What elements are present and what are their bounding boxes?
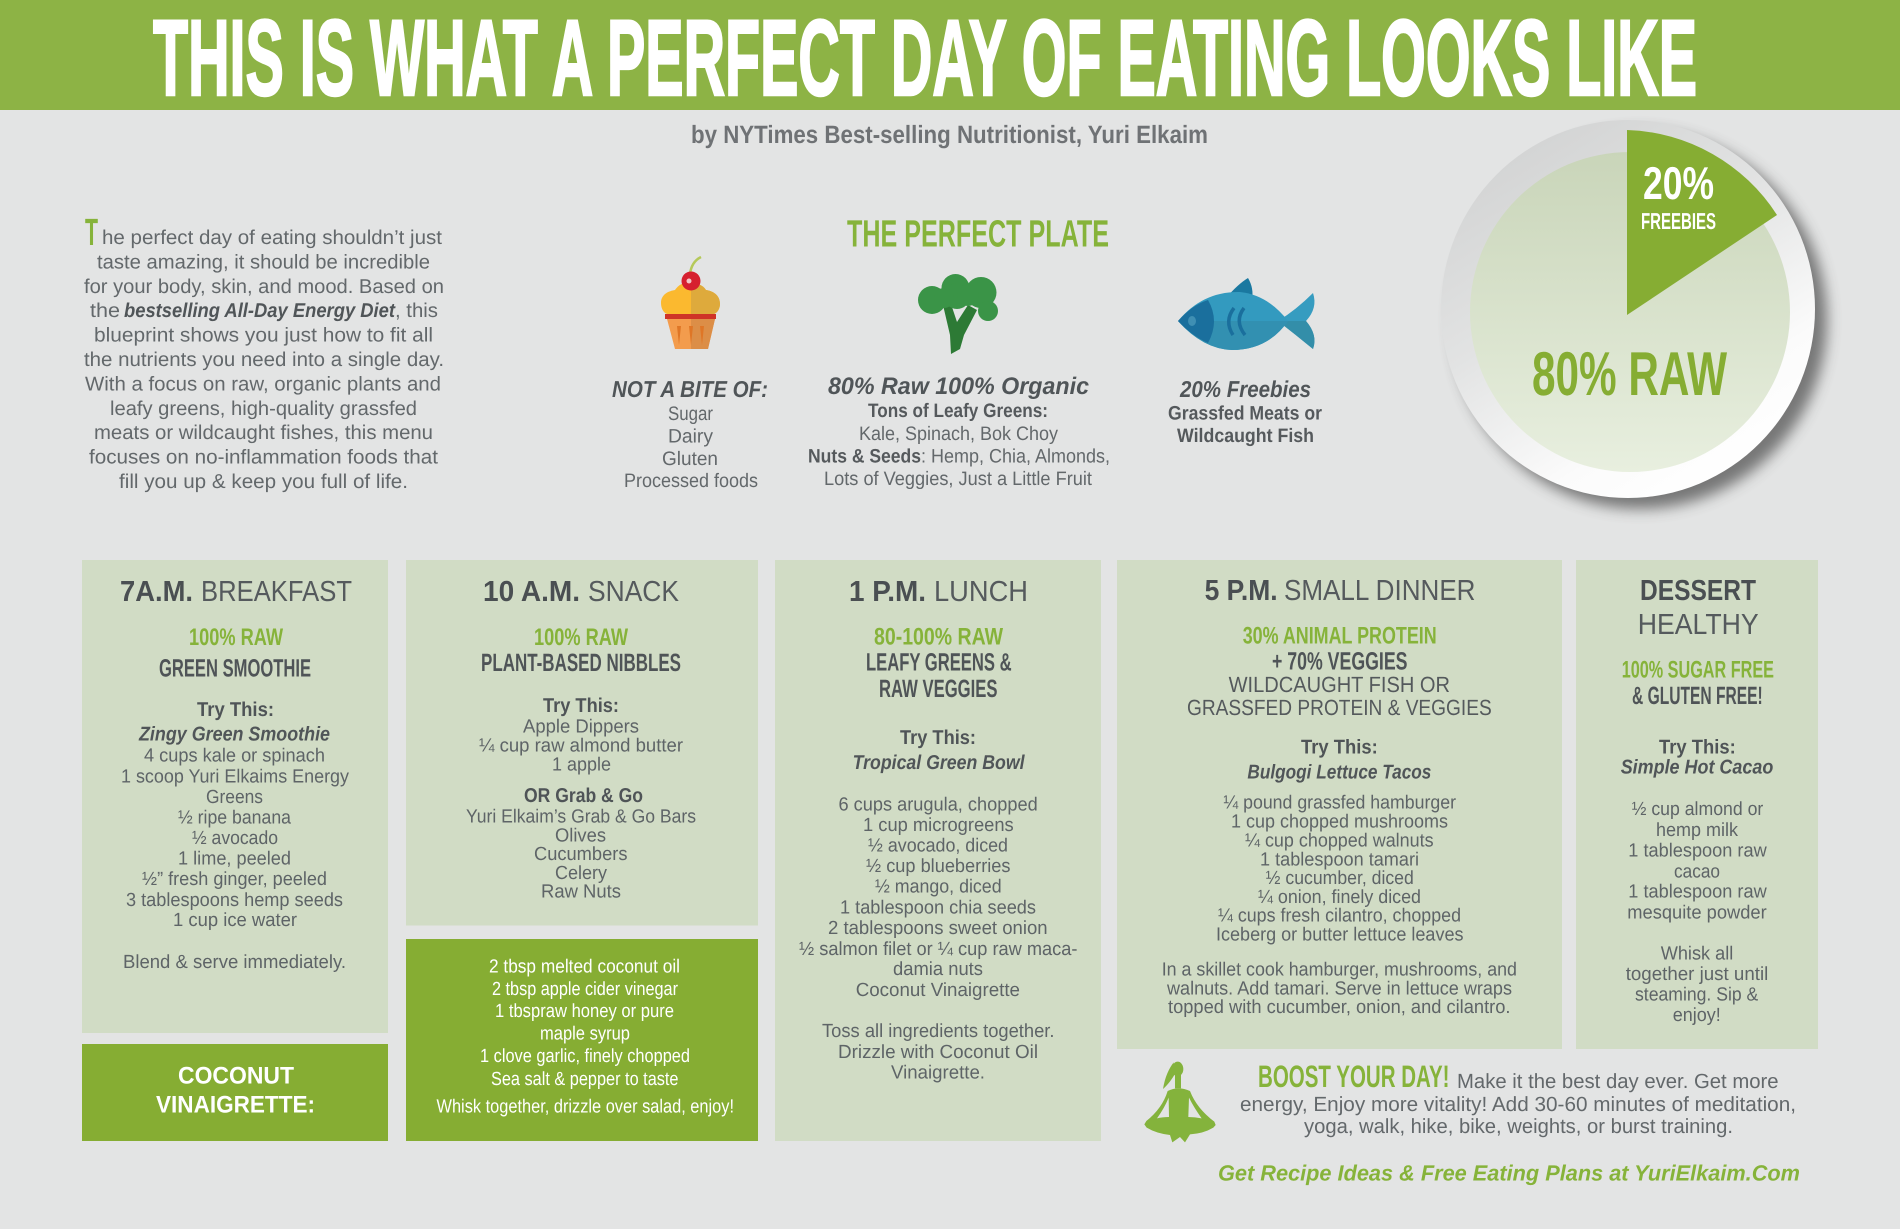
freebies column [1168, 376, 1322, 447]
not a bite of column: NOT A BITE OF: [612, 376, 768, 402]
intro paragraph: the [90, 300, 120, 322]
dinner subheading: + 70% VEGGIES [1272, 647, 1408, 675]
dessert recipe: 1 tablespoon raw [1628, 841, 1767, 862]
intro paragraph: meats or wildcaught fishes, this menu [94, 422, 433, 444]
raw organic column: 80% Raw 100% Organic [828, 373, 1089, 400]
dessert subheading [1622, 656, 1774, 710]
dinner heading: SMALL DINNER [1284, 575, 1476, 607]
snack recipe: Raw Nuts [541, 882, 621, 902]
intro paragraph: for your body, skin, and mood. Based on [84, 276, 444, 298]
boost your day callout [1240, 1059, 1796, 1138]
raw organic column: Nuts & Seeds [808, 446, 921, 468]
icon: cupcake [661, 257, 720, 349]
not a bite of column: Gluten [662, 448, 718, 470]
lunch heading: LUNCH [934, 576, 1028, 608]
wedge label: FREEBIES [1641, 208, 1716, 234]
panel: vinaigrette recipe [406, 939, 758, 1141]
intro paragraph: the nutrients you need into a single day. [84, 349, 444, 371]
snack recipe [466, 695, 696, 902]
dessert heading: DESSERT [1640, 575, 1756, 607]
breakfast recipe: ½” fresh ginger, peeled [142, 869, 327, 890]
dinner recipe: Iceberg or butter lettuce leaves [1216, 924, 1464, 946]
snack heading: 10 A.M. [483, 576, 580, 608]
dinner subheading: GRASSFED PROTEIN & VEGGIES [1187, 695, 1492, 720]
lunch recipe [799, 727, 1078, 1084]
icon: broccoli [918, 274, 998, 354]
panel: dessert [1576, 560, 1818, 1049]
panel: breakfast [82, 560, 388, 1033]
intro paragraph: , this [395, 300, 438, 322]
snack recipe: Cucumbers [534, 844, 628, 865]
dessert recipe: Simple Hot Cacao [1621, 756, 1773, 778]
byline: by NYTimes Best-selling Nutritionist, Yuri Elkaim [691, 121, 1208, 149]
snack recipe: Yuri Elkaim’s Grab & Go Bars [466, 806, 696, 828]
raw organic column: Kale, Spinach, Bok Choy [859, 423, 1058, 445]
lunch recipe: Toss all ingredients together. [822, 1021, 1054, 1042]
snack subheading: PLANT-BASED NIBBLES [481, 649, 681, 677]
dessert recipe: steaming. Sip & [1635, 985, 1759, 1006]
dinner recipe [1162, 736, 1517, 1018]
lunch subheading [866, 623, 1012, 703]
intro paragraph: blueprint shows you just how to fit all [94, 325, 433, 347]
dessert recipe: ½ cup almond or [1632, 799, 1764, 820]
lunch recipe: Try This: [900, 727, 976, 749]
not a bite of column: Dairy [668, 426, 713, 448]
not a bite of column [612, 376, 768, 492]
breakfast subheading [159, 624, 311, 682]
dessert recipe: mesquite powder [1627, 902, 1767, 923]
breakfast recipe: 3 tablespoons hemp seeds [126, 890, 343, 911]
lunch recipe: damia nuts [893, 959, 983, 980]
breakfast recipe: ½ avocado [192, 828, 278, 849]
panel: vinaigrette recipe: maple syrup [540, 1024, 630, 1044]
boost your day callout: yoga, walk, hike, bike, weights, or burst training. [1304, 1115, 1733, 1138]
not a bite of column: Sugar [668, 403, 713, 425]
dinner recipe: ¼ onion, finely diced [1258, 887, 1421, 908]
icon: fish [1178, 278, 1314, 350]
dinner recipe: ¼ cup chopped walnuts [1245, 830, 1434, 852]
freebies wedge [1627, 130, 1777, 315]
snack recipe: 1 apple [552, 754, 611, 776]
breakfast subheading: GREEN SMOOTHIE [159, 654, 311, 682]
dinner subheading [1187, 623, 1492, 720]
heading: the perfect plate: THE PERFECT PLATE [847, 214, 1109, 256]
intro paragraph: With a focus on raw, organic plants and [85, 373, 441, 395]
breakfast heading: 7A.M. [120, 576, 193, 608]
breakfast recipe: Blend & serve immediately. [123, 952, 346, 973]
raw label: 80% RAW [1532, 340, 1727, 409]
breakfast recipe: 1 cup ice water [173, 910, 298, 931]
raw organic column: Tons of Leafy Greens: [868, 400, 1048, 422]
dessert recipe: Whisk all [1661, 943, 1733, 964]
snack recipe: Celery [555, 863, 607, 884]
lunch subheading: 80-100% RAW [874, 623, 1003, 650]
dinner heading [1205, 575, 1476, 607]
dessert recipe: together just until [1626, 964, 1768, 985]
intro paragraph: taste amazing, it should be incredible [97, 251, 430, 273]
lunch recipe: Vinaigrette. [891, 1062, 985, 1084]
dinner subheading: 30% ANIMAL PROTEIN [1243, 623, 1437, 650]
boost your day callout: energy, Enjoy more vitality! Add 30-60 minutes of meditation, [1240, 1093, 1796, 1116]
snack subheading [481, 624, 681, 677]
panel: vinaigrette recipe: 2 tbsp apple cider vinegar [492, 979, 679, 1000]
lunch heading: 1 P.M. [849, 576, 926, 608]
panel: coconut vinaigrette label: COCONUT [178, 1063, 294, 1090]
dinner recipe: 1 tablespoon tamari [1260, 850, 1419, 870]
lunch recipe: 6 cups arugula, chopped [838, 794, 1038, 816]
lunch subheading: RAW VEGGIES [879, 675, 998, 703]
lunch recipe: ½ avocado, diced [868, 836, 1008, 857]
boost your day callout: Make it the best day ever. Get more [1457, 1070, 1779, 1093]
panel: coconut vinaigrette label [82, 1044, 388, 1141]
plate chart: 80% raw 20% freebies [1441, 120, 1827, 509]
panel: vinaigrette recipe: 1 tbspraw honey or pure [495, 1001, 674, 1022]
raw organic column: : Hemp, Chia, Almonds, [921, 446, 1110, 468]
dinner subheading: WILDCAUGHT FISH OR [1229, 672, 1450, 697]
lunch recipe: 2 tablespoons sweet onion [828, 918, 1048, 939]
breakfast recipe: Greens [206, 787, 263, 808]
dessert recipe [1621, 736, 1773, 1026]
icon: meditating figure [1144, 1062, 1216, 1142]
drop cap: T [85, 212, 98, 254]
not a bite of column: Processed foods [624, 470, 758, 492]
dinner recipe: In a skillet cook hamburger, mushrooms, and [1162, 960, 1517, 981]
lunch recipe: 1 cup microgreens [863, 815, 1014, 836]
dinner recipe: ¼ cups fresh cilantro, chopped [1218, 906, 1461, 926]
dinner recipe: Bulgogi Lettuce Tacos [1247, 762, 1431, 784]
raw organic column: Lots of Veggies, Just a Little Fruit [824, 468, 1093, 490]
snack heading [483, 576, 680, 608]
breakfast recipe: 1 lime, peeled [178, 849, 291, 870]
snack heading: SNACK [588, 576, 680, 608]
dessert subheading: 100% SUGAR FREE [1622, 656, 1774, 683]
freebies column: 20% Freebies [1179, 376, 1311, 402]
dessert recipe: 1 tablespoon raw [1628, 882, 1767, 903]
breakfast recipe: Zingy Green Smoothie [138, 724, 330, 746]
lunch recipe: Coconut Vinaigrette [856, 980, 1020, 1001]
panel: small dinner [1117, 560, 1562, 1049]
lunch heading [849, 576, 1028, 608]
dinner recipe: ½ cucumber, diced [1266, 868, 1414, 889]
lunch recipe: ½ salmon filet or ¼ cup raw maca- [799, 939, 1078, 960]
intro paragraph: bestselling All-Day Energy Diet [124, 300, 396, 322]
freebies column: Wildcaught Fish [1177, 425, 1314, 447]
wedge label [1641, 157, 1716, 234]
panel: coconut vinaigrette label: VINAIGRETTE: [156, 1092, 315, 1118]
dessert heading [1638, 575, 1759, 641]
panel: vinaigrette recipe: Whisk together, drizzle over salad, enjoy! [436, 1096, 734, 1118]
dinner heading: 5 P.M. [1205, 575, 1278, 607]
intro paragraph: leafy greens, high-quality grassfed [110, 398, 417, 420]
snack recipe: Apple Dippers [523, 716, 639, 738]
breakfast recipe: 1 scoop Yuri Elkaims Energy [121, 766, 349, 787]
lunch recipe: Drizzle with Coconut Oil [838, 1042, 1038, 1063]
intro paragraph: fill you up & keep you full of life. [119, 471, 408, 493]
lunch recipe: 1 tablespoon chia seeds [840, 898, 1036, 919]
panel: vinaigrette recipe: Sea salt & pepper to taste [491, 1069, 678, 1090]
breakfast heading [120, 576, 352, 608]
lunch recipe: ½ mango, diced [875, 877, 1002, 898]
breakfast subheading: 100% RAW [189, 624, 283, 651]
dinner recipe: walnuts. Add tamari. Serve in lettuce wraps [1166, 979, 1512, 1000]
dessert recipe: enjoy! [1673, 1005, 1721, 1026]
breakfast recipe [121, 699, 349, 973]
panel: vinaigrette recipe: 2 tbsp melted coconut oil [489, 956, 680, 978]
intro paragraph: he perfect day of eating shouldn’t just [102, 227, 442, 249]
breakfast heading: BREAKFAST [201, 576, 352, 608]
snack recipe: OR Grab & Go [524, 785, 643, 807]
boost your day callout: BOOST YOUR DAY! [1258, 1059, 1450, 1094]
dinner recipe: ¼ pound grassfed hamburger [1223, 792, 1457, 814]
snack recipe: Try This: [543, 695, 619, 717]
dessert recipe: hemp milk [1656, 820, 1738, 841]
intro paragraph: focuses on no-inflammation foods that [89, 447, 438, 469]
breakfast recipe: Try This: [197, 699, 274, 721]
snack recipe: ¼ cup raw almond butter [479, 736, 684, 756]
lunch recipe: Tropical Green Bowl [853, 752, 1025, 774]
lunch subheading: LEAFY GREENS & [866, 648, 1012, 676]
lunch recipe: ½ cup blueberries [866, 856, 1010, 877]
dinner recipe: topped with cucumber, onion, and cilantro. [1168, 997, 1510, 1018]
dessert recipe: Try This: [1659, 736, 1736, 758]
snack recipe: Olives [555, 826, 606, 846]
footer link: Get Recipe Ideas & Free Eating Plans at YuriElkaim.Com [1218, 1161, 1800, 1186]
dinner recipe: 1 cup chopped mushrooms [1231, 812, 1448, 832]
dessert subheading: & GLUTEN FREE! [1632, 682, 1763, 710]
breakfast recipe: 4 cups kale or spinach [144, 746, 325, 766]
panel: lunch [775, 560, 1101, 1141]
dinner recipe: Try This: [1301, 736, 1378, 758]
dessert recipe: cacao [1674, 861, 1720, 882]
wedge label: 20% [1643, 157, 1714, 209]
snack subheading: 100% RAW [534, 624, 628, 651]
dessert heading: HEALTHY [1638, 609, 1759, 641]
freebies column: Grassfed Meats or [1168, 402, 1322, 424]
panel: snack [406, 560, 758, 926]
intro paragraph [84, 212, 444, 493]
panel: vinaigrette recipe: 1 clove garlic, finely chopped [480, 1046, 690, 1067]
header banner [0, 0, 1900, 110]
breakfast recipe: ½ ripe banana [178, 808, 291, 828]
raw organic column [808, 373, 1110, 490]
